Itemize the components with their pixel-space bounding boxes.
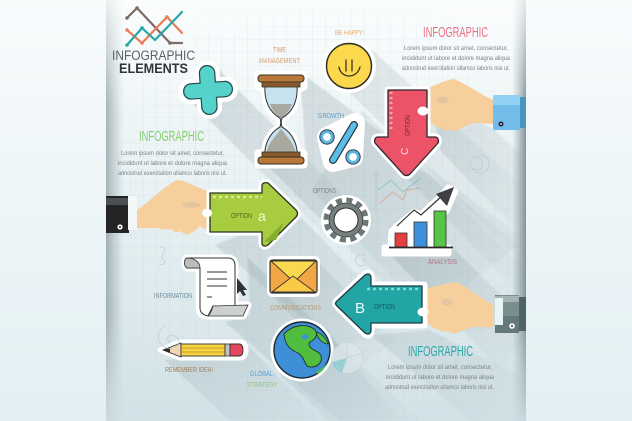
label: options: OPTIONS: [313, 188, 336, 195]
label: global strategy: GLOBAL: [250, 371, 273, 378]
logo: line chart: [125, 6, 182, 47]
hand: left: [106, 180, 210, 234]
label: remember idea: REMEMBER IDEA!: [165, 367, 213, 374]
arrow B: teal: [336, 273, 424, 335]
text block: left: INFOGRAPHIC: [139, 128, 204, 145]
label: information: INFORMATION: [154, 293, 192, 300]
icon: percent: [320, 123, 360, 164]
decorative swirls: [158, 155, 489, 349]
label: time management: MANAGEMENT: [259, 58, 301, 65]
label: be happy: BE HAPPY!: [335, 30, 364, 37]
logo: title: INFOGRAPHIC: [112, 48, 195, 63]
icon: smiley: [322, 39, 376, 93]
chart: faint pie: [332, 342, 362, 374]
text block: top right: adnostrud exercitation ullamco laboris nisi ut.: [402, 66, 510, 72]
hand thumb left: [202, 208, 212, 218]
text block: bottom right: INFOGRAPHIC: [408, 343, 473, 360]
text block: left: incididunt ut labore et dolore magna aliqua: [118, 161, 228, 167]
text block: top right: [402, 24, 511, 72]
logo: title: [112, 48, 195, 76]
label: time management: [259, 47, 301, 65]
text block: bottom right: adnostrud exercitation ullamco laboris nisi ut.: [385, 385, 494, 391]
long shadows: [165, 50, 526, 421]
arrow A: green: [210, 183, 298, 246]
hand thumb top right: [418, 106, 428, 116]
label: option B: B: [355, 300, 365, 317]
text block: left: Lorem ipsum dolor sit amet, consectetur,: [121, 151, 224, 157]
arrow C: red: [375, 90, 438, 176]
icon: plus: [176, 59, 240, 121]
icon: hourglass: [258, 74, 304, 165]
text block: top right: incididunt ut labore et dolore magna aliqua: [402, 56, 511, 62]
arrow A: green: a: [258, 208, 266, 224]
arrow B: teal: OPTION: [374, 304, 395, 311]
label: communications: COMMUNICATIONS: [270, 305, 321, 312]
hand thumb bottom right: [418, 308, 428, 316]
label: global strategy: STRATEGY: [247, 382, 277, 389]
hand: top right: [415, 79, 526, 131]
icon: envelope: [267, 256, 320, 297]
label: option A: OPTION: [231, 213, 252, 220]
text block: top right: Lorem ipsum dolor sit amet, consectetur,: [404, 46, 508, 52]
text block: bottom right: [385, 343, 495, 391]
hand: bottom right: [418, 282, 526, 333]
label: growth: GROWTH: [318, 113, 344, 120]
text block: left: [118, 128, 228, 177]
label: option C: OPTION: [405, 115, 412, 136]
icon: bar chart: [384, 187, 456, 254]
page panel: [106, 0, 526, 421]
arrow C: red: C: [400, 148, 411, 155]
text block: bottom right: incididunt ut labore et dolore magna aliqua: [386, 375, 495, 381]
icon: scroll: [184, 258, 248, 316]
label: global strategy: [247, 371, 277, 389]
text block: top right: INFOGRAPHIC: [423, 24, 488, 41]
icon: pencil: [160, 342, 246, 358]
label: time management: TIME: [273, 47, 286, 54]
icon: gear: [321, 195, 371, 245]
icon: faint arrows: [373, 172, 421, 212]
text block: bottom right: Lorem ipsum dolor sit amet, consectetur,: [388, 365, 492, 371]
label: analysis: ANALYSIS: [428, 259, 457, 266]
text block: left: adnostrud exercitation ullamco laboris nisi ut.: [118, 171, 227, 177]
icon: globe: [270, 318, 334, 382]
logo: title: ELEMENTS: [119, 60, 188, 76]
